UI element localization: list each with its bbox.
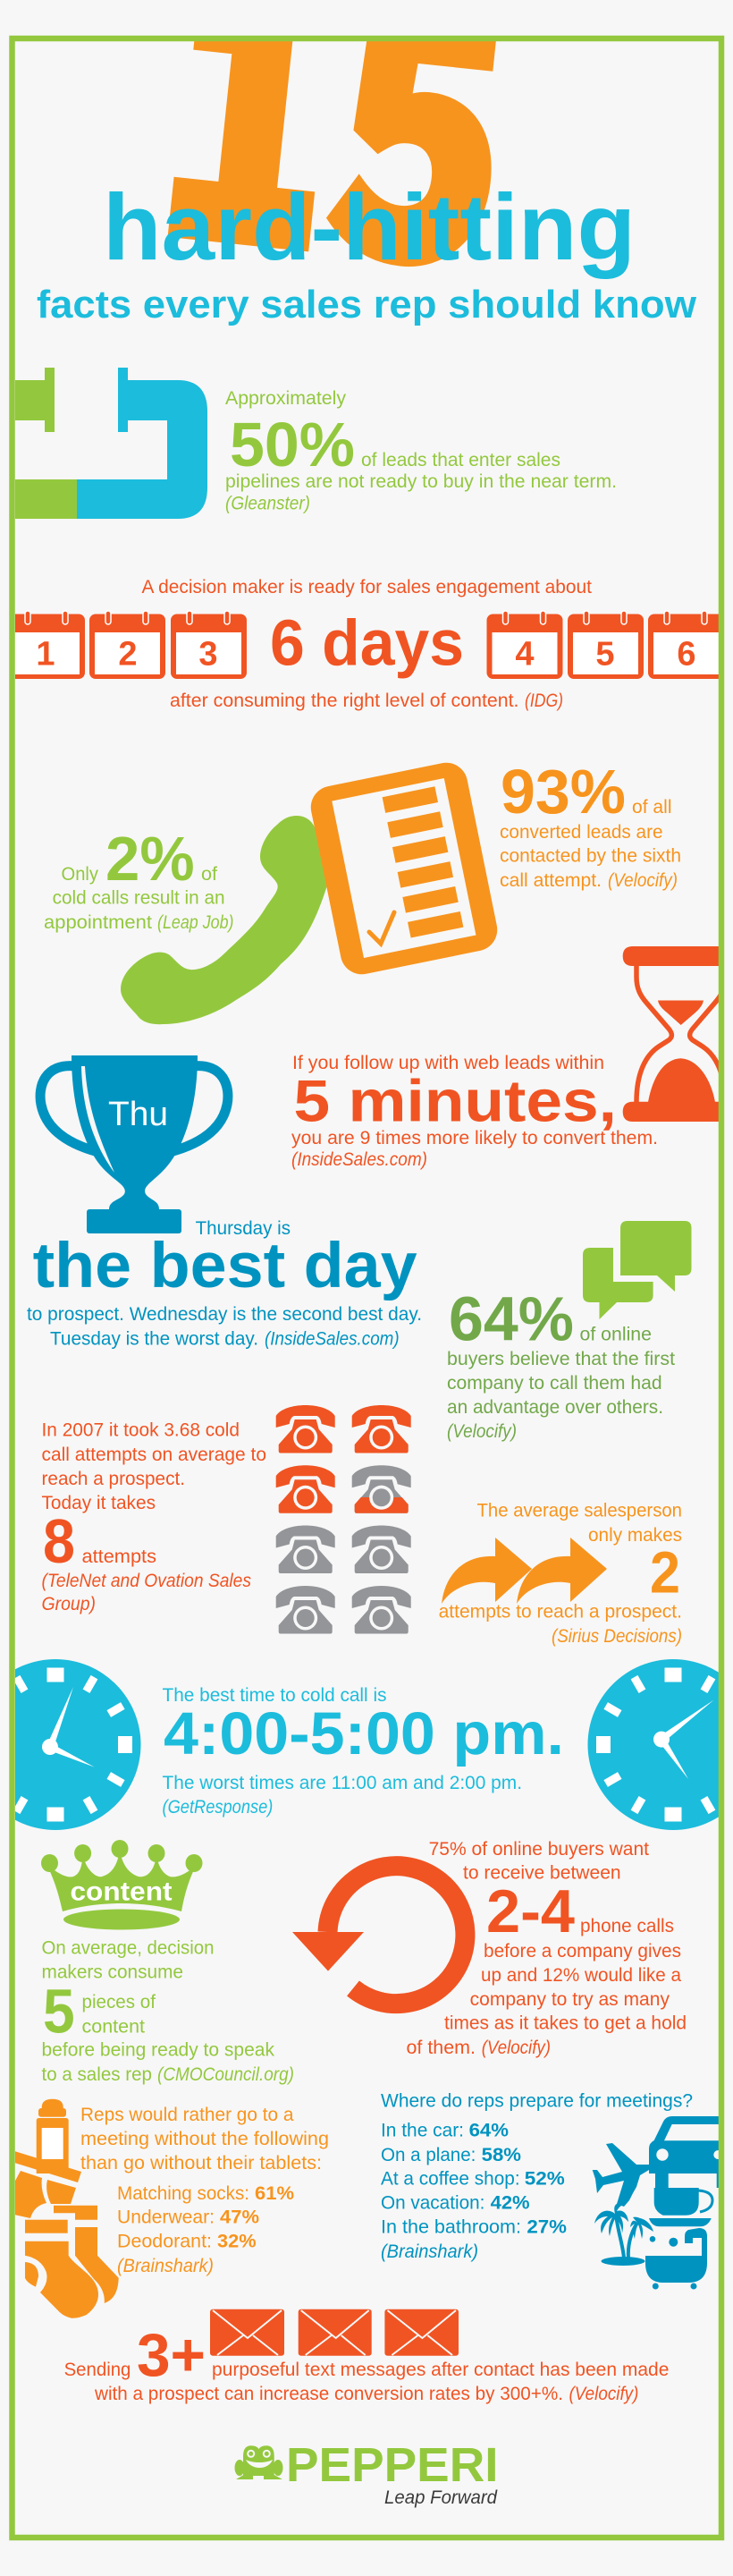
panel: the best day [27,1055,422,1349]
panel: where reps prepare [381,2091,722,2290]
icon: calendars: 1 [36,635,55,673]
panel: 2-4 phone calls [292,1839,687,2058]
text block: attempts to reach a prospect. [439,1602,682,1623]
text block: (Velocify) [482,2038,551,2058]
text block: (Brainshark) [381,2241,478,2262]
text block: (Sirius Decisions) [552,1626,682,1647]
text block: In the bathroom: [381,2217,521,2238]
text block: company to try as many [470,1989,670,2010]
icon: right clock [588,1659,733,1830]
icon: calendars: 4 [515,635,535,673]
panel: 8 attempts [41,1405,411,1633]
text block: content [82,2016,145,2037]
text block [291,1053,658,1170]
panel: reps would rather [14,2099,329,2318]
text block: 75% of online buyers want [429,1839,649,1860]
text block: 93% [501,757,626,826]
text block: with a prospect can increase conversion rates by 300+%. [94,2384,563,2404]
text block: Tuesday is the worst day. [50,1329,258,1349]
panel: 2% cold calls [44,816,327,1024]
icon: calendars: 6 [677,635,696,673]
icon: speech bubbles [583,1221,692,1319]
text block: the best day [33,1231,417,1301]
text: source line: after consuming the right level of content. [170,691,518,711]
text block: If you follow up with web leads within [292,1053,604,1073]
text block: reach a prospect. [41,1469,185,1489]
text block: call attempt. [500,870,602,891]
panel: 5 minutes [291,946,725,1170]
text block [80,2105,329,2276]
text block: 2 [650,1538,680,1605]
text block: appointment [44,912,152,933]
text block: 42% [491,2193,530,2213]
text block: 5 [43,1976,75,2046]
text block: purposeful text messages after contact has been made [212,2360,669,2380]
text block: (Leap Job) [157,912,234,933]
text block: pipelines are not ready to buy in the near term. [225,471,617,492]
text block: before being ready to speak [41,2040,274,2061]
text block: (InsideSales.com) [265,1329,400,1349]
text block: Where do reps prepare for meetings? [381,2091,693,2111]
text block: Group) [41,1594,96,1614]
text block: times as it takes to get a hold [444,2013,687,2034]
wordmark: PEPPERI [286,2438,499,2492]
text block [45,836,232,932]
text: source line: (IDG) [525,691,563,711]
text block: 2-4 [486,1877,575,1945]
text block: 64% [469,2121,509,2141]
icon: calendars: 2 [118,635,138,673]
text block: The best time to cold call is [163,1685,386,1706]
label: Thu: Thu [108,1096,168,1133]
text block: Deodorant: [117,2231,212,2252]
icon: left clock [15,1659,141,1830]
icon: calendars: 3 [198,635,218,673]
text block: to receive between [463,1863,621,1884]
text block: phone calls [580,1916,674,1936]
panel: 3+ text messages [64,2309,669,2404]
text block: 50% [230,410,355,479]
panel: 6 days [9,577,724,711]
text block: (CMOCouncil.org) [157,2064,294,2085]
text block: company to call them had [447,1373,662,1394]
text block: makers consume [41,1962,183,1982]
text block: to a sales rep [41,2064,152,2085]
text block [501,769,680,891]
text block: 2% [105,824,195,894]
text block [163,1685,564,1818]
panel: 2 attempts [439,1501,682,1647]
text block: On a plane: [381,2145,476,2165]
text block [447,1284,675,1442]
text block: pieces of [82,1992,156,2012]
text block: (Velocify) [447,1421,517,1442]
text block: 61% [255,2183,294,2204]
text block [27,1218,422,1349]
text block [41,1938,294,2085]
tagline: Leap Forward [384,2487,498,2508]
icon: envelopes [210,2309,459,2356]
text block: At a coffee shop: [381,2169,520,2190]
text block: The average salesperson [477,1501,682,1521]
icon: calendars: 5 [595,635,615,673]
subtitle: facts every sales rep should know [37,283,697,326]
text block: 64% [449,1284,574,1354]
text block: Today it takes [41,1493,156,1513]
panel: best time to call [0,1659,733,1830]
icon: crown [41,1840,202,1930]
header [38,41,697,326]
text block: 58% [482,2145,521,2165]
text block: (Velocify) [608,870,678,891]
text block: meeting without the following [80,2129,329,2149]
text block: to prospect. Wednesday is the second best day. [27,1304,422,1325]
text block: an advantage over others. [447,1397,663,1418]
text block: In 2007 it took 3.68 cold [41,1420,240,1441]
text block: 32% [217,2231,257,2252]
text block: only makes [588,1525,682,1546]
panel: 64% of online buyers [447,1221,692,1442]
icon: trophy [40,1055,228,1233]
text block: converted leads are [500,822,663,843]
text block: (GetResponse) [163,1797,273,1818]
text block: of online [579,1324,652,1345]
text block: The worst times are 11:00 am and 2:00 pm. [163,1773,522,1793]
text block: Approximately [225,388,346,409]
text block: On vacation: [381,2193,484,2213]
text block: than go without their tablets: [80,2153,322,2174]
text block: 47% [220,2207,259,2228]
text block: Only [61,864,98,885]
stat: 6 days: 6 days [270,608,464,680]
text block: 27% [527,2217,567,2238]
panel: 50% of leads [9,368,617,519]
text block: 3+ [137,2321,206,2389]
text block: (InsideSales.com) [291,1149,427,1170]
icon: pipeline [9,368,207,519]
text block: you are 9 times more likely to convert them. [291,1128,658,1148]
text block [225,388,617,513]
text block [439,1501,682,1647]
text block: On average, decision [41,1938,215,1959]
logo: Pepperi [234,2438,499,2508]
text block: 5 minutes, [293,1068,617,1134]
icon: arrows [442,1538,607,1604]
text block: buyers believe that the first [447,1349,675,1369]
text block: of [201,864,217,885]
text block [41,1420,266,1614]
text block: 8 [43,1506,75,1576]
text: intro: A decision maker is ready for sales engagement about [141,577,592,597]
text block: Reps would rather go to a [80,2105,294,2125]
panel: 93% converted leads [307,757,681,979]
text block: (Brainshark) [117,2256,214,2276]
icon: telephone grid [276,1405,411,1633]
text block: Thursday is [196,1218,291,1239]
text block: of them. [406,2038,476,2058]
text block: Matching socks: [117,2183,249,2204]
text block [406,1839,687,2058]
text block: (Gleanster) [225,494,310,513]
text block [381,2091,693,2262]
icon: deodorant, underwear and socks [14,2099,119,2318]
text block: 4:00-5:00 pm. [164,1700,564,1767]
text block: Sending [64,2360,131,2380]
text block: of leads that enter sales [361,450,560,470]
title: hard-hitting: hard-hitting [103,175,636,280]
text block: Underwear: [117,2207,215,2228]
text block: up and 12% would like a [481,1965,681,1986]
text block: (Velocify) [569,2384,638,2404]
text block: call attempts on average to [41,1445,266,1465]
text block: 52% [525,2169,565,2190]
icon: car, plane, cup, palm and bath [593,2116,722,2290]
icon: circular arrow [292,1866,465,2004]
panel: 5 pieces of content [41,1840,294,2085]
text block: (TeleNet and Ovation Sales [41,1571,251,1591]
text block: before a company gives [484,1941,681,1962]
text block: cold calls result in an [53,888,225,909]
label: content: content [70,1877,173,1906]
icon: hourglass [623,946,725,1122]
text block: attempts [82,1546,156,1567]
text block: of all [632,797,672,818]
icon: phone handset [121,816,327,1024]
icon: frog [234,2445,282,2479]
icon: calendars [9,611,724,679]
icon: check mark [369,912,394,944]
text block [64,2321,669,2404]
text block: contacted by the sixth [500,846,681,867]
icon: clipboard checklist [307,758,501,979]
text block: In the car: [381,2121,464,2141]
